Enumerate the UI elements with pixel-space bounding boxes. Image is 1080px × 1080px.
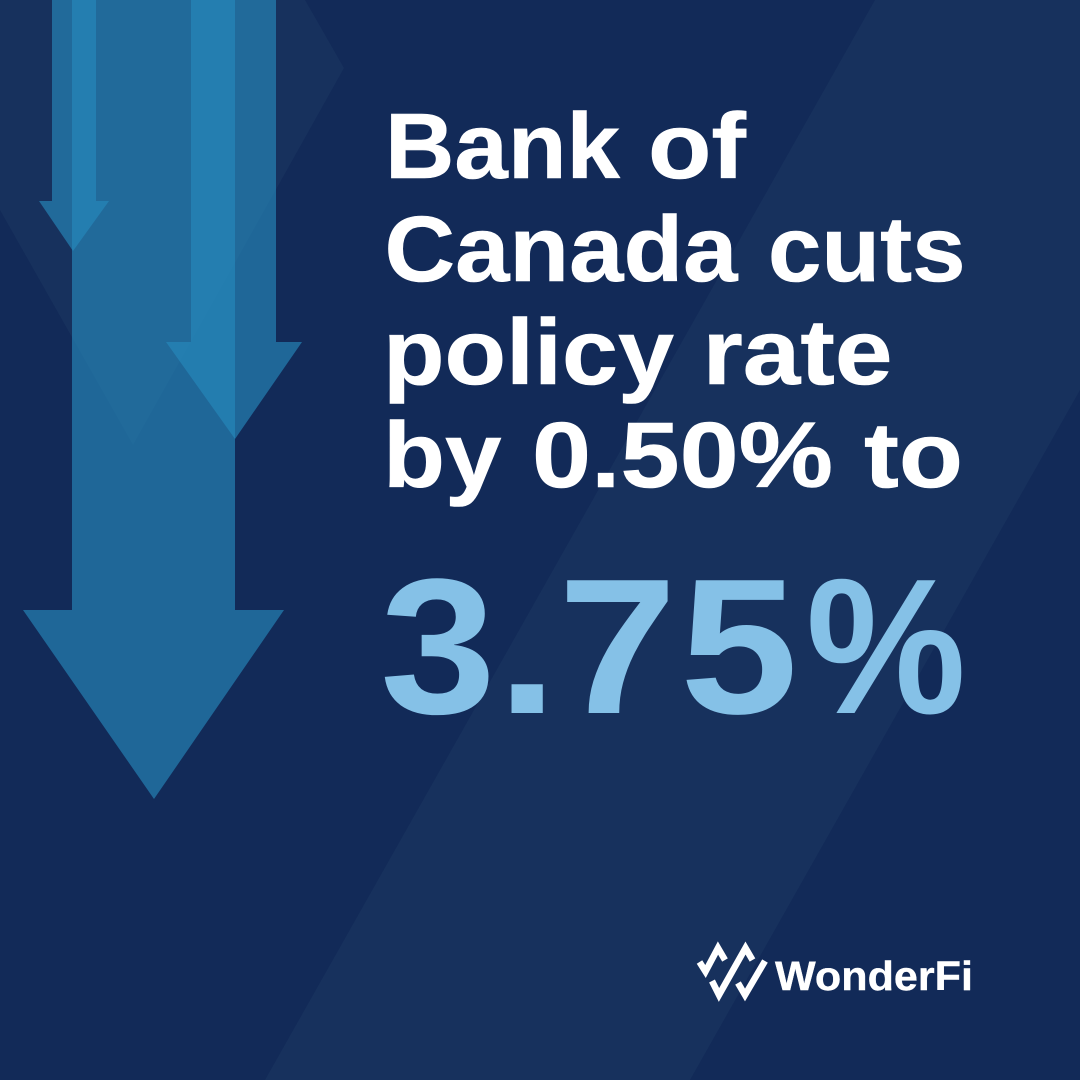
title: policy	[383, 300, 674, 404]
rate figure: .	[496, 538, 558, 754]
title: Canada	[384, 197, 739, 301]
icon: large down arrow	[23, 0, 284, 799]
logo: WonderFi	[700, 948, 973, 999]
rate figure: 5	[680, 538, 798, 754]
title	[383, 94, 966, 507]
title: to	[864, 403, 963, 507]
title: rate	[702, 300, 892, 404]
title: Bank	[385, 94, 620, 198]
wordmark: WonderFi	[775, 953, 973, 999]
rate figure: 7	[558, 538, 677, 754]
title: cuts	[768, 197, 966, 301]
title: of	[648, 94, 747, 198]
title: 0.50%	[532, 403, 833, 507]
rate figure: 3	[380, 538, 496, 754]
rate figure: %	[806, 538, 966, 754]
title: by	[383, 403, 502, 507]
icon: medium down arrow	[166, 0, 302, 439]
rate figure	[380, 538, 966, 754]
icon: small down arrow	[39, 0, 109, 251]
icon: WonderFi mark	[700, 948, 765, 995]
